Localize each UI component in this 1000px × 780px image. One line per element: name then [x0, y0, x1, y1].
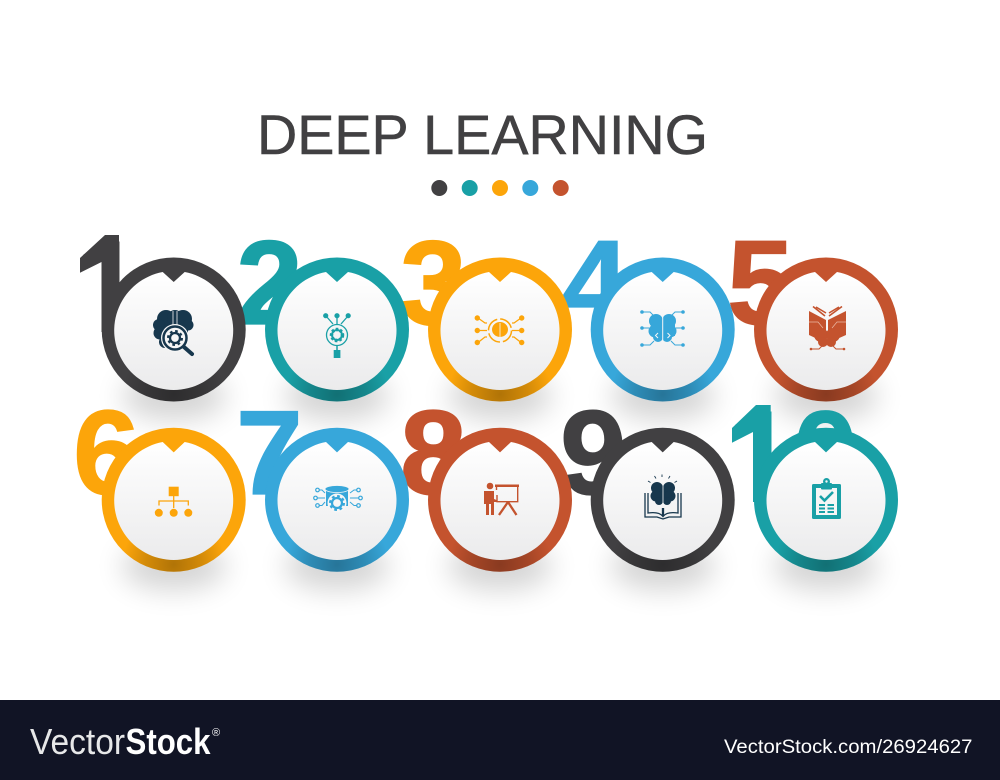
icon: brain with circuit nodes [475, 315, 524, 345]
number 5: 5 [727, 216, 794, 350]
ring 2 [265, 258, 409, 402]
number 9: 9 [560, 386, 627, 520]
title dots [431, 180, 569, 196]
ring 10 [754, 428, 898, 572]
number 2: 2 [236, 216, 303, 350]
ring 6 [102, 428, 246, 572]
soft shadows below the rings [122, 372, 878, 590]
icon: brain with magnifier [153, 310, 194, 354]
number 1 [80, 235, 120, 332]
icon: open book with brain [809, 306, 846, 350]
number 7: 7 [236, 386, 303, 520]
number 10: 1 [727, 386, 794, 520]
icon: book with brain [645, 474, 681, 519]
number 6: 6 [73, 386, 140, 520]
icon: gear with connected nodes [323, 313, 351, 358]
number 1: 1 [75, 216, 142, 350]
icon: circuit brain [640, 310, 685, 347]
icon: database with gear [314, 486, 362, 512]
number 8: 8 [400, 386, 467, 520]
ring 3 [428, 258, 572, 402]
ring 1 [102, 258, 246, 402]
ring 4 [591, 258, 735, 402]
ring 8 [428, 428, 572, 572]
icon: presenter and board [484, 483, 519, 515]
number 4: 4 [562, 216, 629, 350]
large numbers [76, 235, 852, 502]
number 10 [732, 405, 852, 502]
ring 9 [591, 428, 735, 572]
logo wordmark: Vector [30, 721, 125, 762]
title: DEEP LEARNING [257, 103, 708, 166]
footer band [0, 700, 1000, 780]
logo bold part: Stock [126, 721, 211, 762]
ring 5 [754, 258, 898, 402]
image id: VectorStock.com/26924627 [724, 736, 972, 758]
ring 7 [265, 428, 409, 572]
number 3: 3 [400, 216, 467, 350]
icon: clipboard with checkmark [812, 478, 841, 519]
icon: hierarchy [155, 487, 192, 517]
number 10: 0 [792, 386, 859, 520]
registered mark: ® [212, 727, 220, 739]
